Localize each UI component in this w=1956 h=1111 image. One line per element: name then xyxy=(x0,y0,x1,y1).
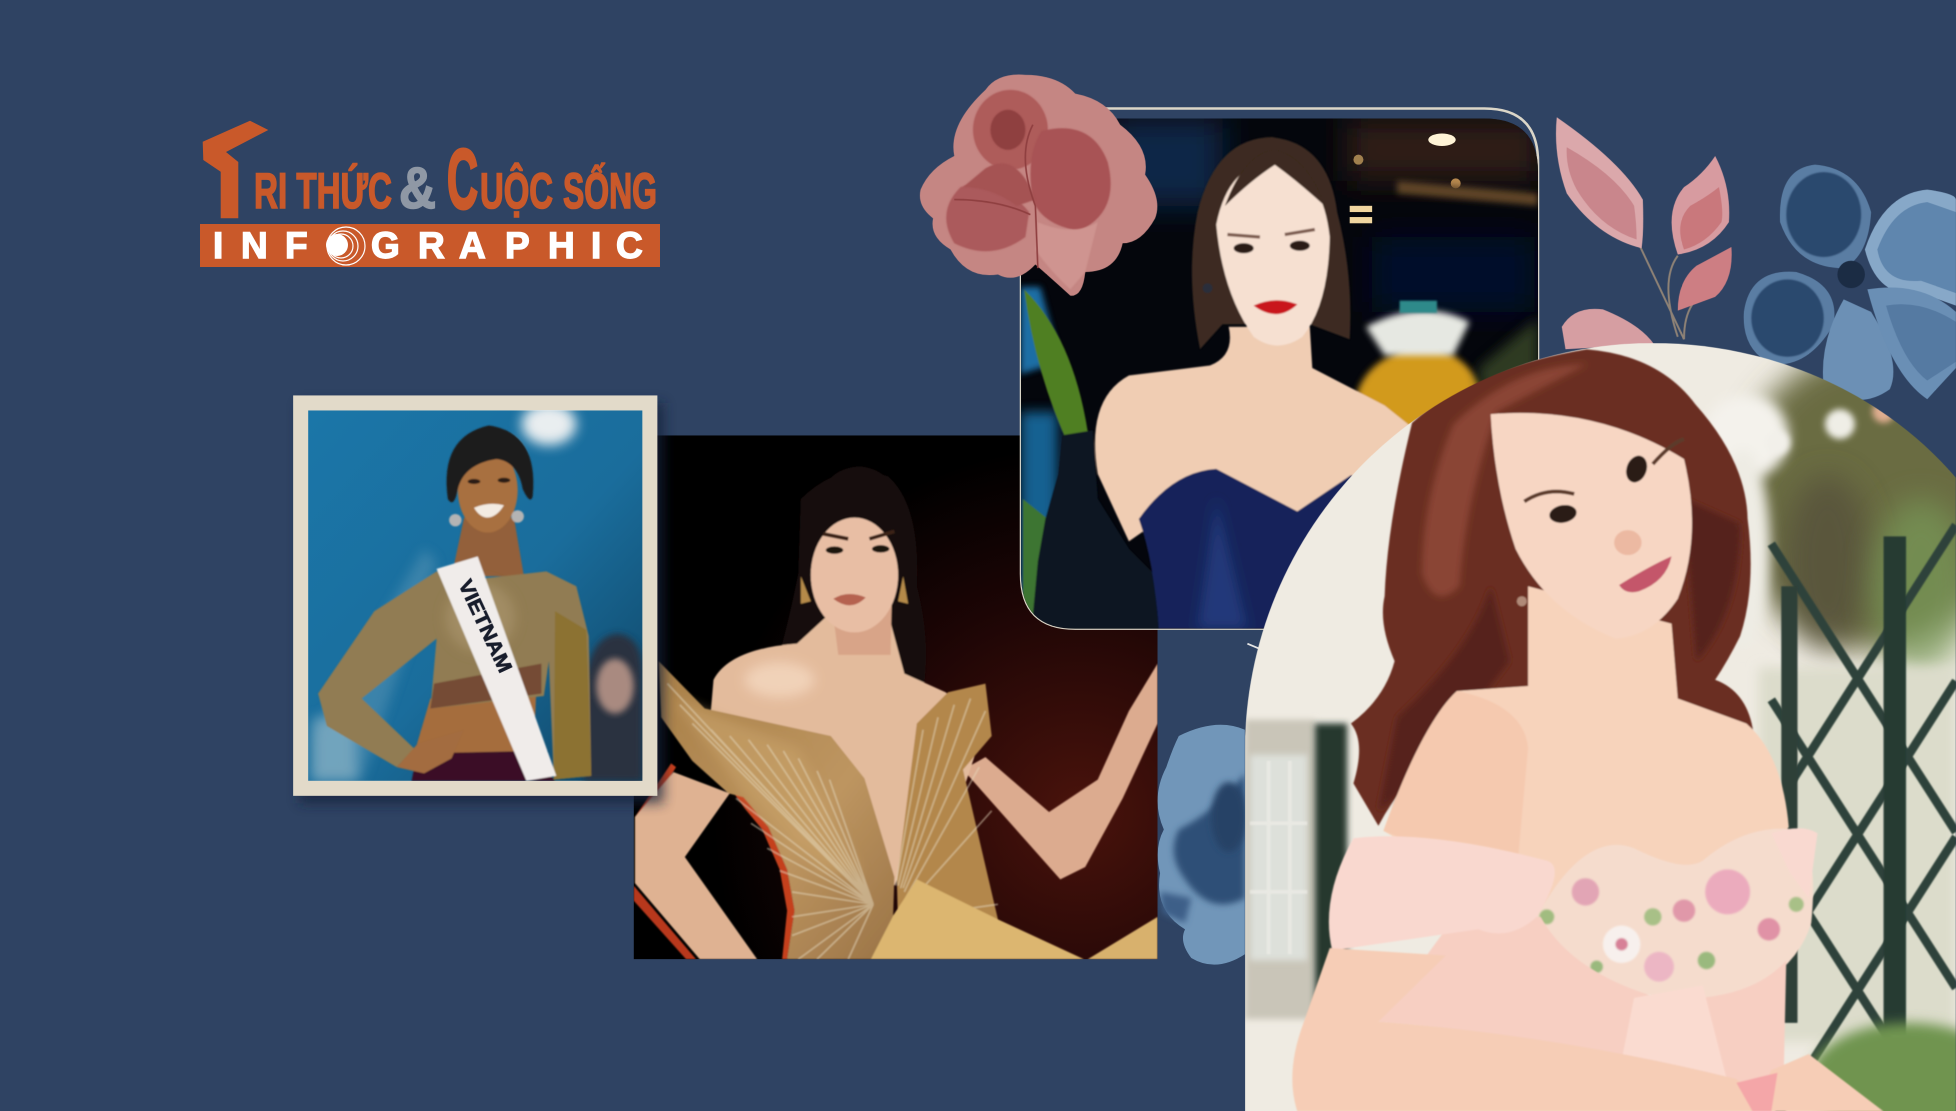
neck xyxy=(834,605,893,655)
sash xyxy=(437,556,556,781)
sash text: VIETNAM xyxy=(453,577,515,676)
bouquet behind xyxy=(1353,350,1482,425)
skirt xyxy=(410,750,556,781)
midriff xyxy=(416,696,537,754)
auburn hair xyxy=(1351,349,1754,826)
face xyxy=(1216,162,1330,346)
lattice trellis xyxy=(1771,525,1956,1111)
logo T mark xyxy=(203,121,268,218)
blue foliage at left xyxy=(1020,412,1058,599)
face xyxy=(1491,413,1692,639)
neck and torso skin xyxy=(1383,586,1789,948)
logo wordmark SỐNG: SỐNG xyxy=(563,162,657,219)
logo: Tri thức & Cuộc sống Infographic xyxy=(200,121,660,267)
logo wordmark UỘC: UỘC xyxy=(480,162,553,219)
golden bodice left xyxy=(659,661,894,959)
wall behind lattice xyxy=(1759,667,1956,1042)
frame shadow xyxy=(299,403,664,803)
short hair xyxy=(447,425,533,502)
logo big C: C xyxy=(447,132,478,226)
back hair xyxy=(1192,137,1350,349)
shoulders and chest xyxy=(710,614,985,886)
green leaf xyxy=(1024,289,1088,449)
background contestant xyxy=(584,634,642,781)
bush xyxy=(1809,1023,1956,1111)
red reflection on left edge xyxy=(635,762,677,817)
embroidered bodice xyxy=(1537,829,1813,999)
decoration: red watercolor peony xyxy=(920,75,1157,296)
right arm and hand xyxy=(963,664,1158,879)
building window xyxy=(1245,720,1315,1019)
face xyxy=(458,448,518,533)
logo ring icon xyxy=(326,227,365,265)
gold top and sleeves xyxy=(318,571,591,780)
hand on hip xyxy=(396,744,455,774)
skirt tulle xyxy=(871,879,1084,959)
neck xyxy=(452,518,524,576)
decoration: blue watercolor peony, lower xyxy=(1158,725,1246,965)
photo: woman with auburn hair and pink gown in large arch xyxy=(1245,343,1956,1111)
sunburst sequin lines xyxy=(667,684,998,959)
golden bodice right xyxy=(897,684,998,929)
rounded outline frame xyxy=(1021,109,1538,629)
eyes, nose and lips xyxy=(1524,439,1684,501)
photo: woman in golden gown on dark background xyxy=(634,435,1158,959)
left arm xyxy=(635,772,757,959)
logo GRAPHIC letters: GRAPHIC xyxy=(371,225,643,266)
white blurred patches xyxy=(1704,394,1789,479)
red dress lining xyxy=(732,791,795,959)
decoration: blue watercolor flower xyxy=(1744,165,1956,400)
photo: woman in navy velvet gown, rounded frame xyxy=(1020,109,1541,630)
flower centre xyxy=(1837,261,1865,288)
small white mark xyxy=(1247,644,1262,650)
logo orange bar xyxy=(200,224,660,267)
photo: woman in sequin top with Vietnam sash xyxy=(293,395,664,803)
photo frame xyxy=(293,395,657,796)
lower arm and hands xyxy=(1292,948,1771,1111)
logo wordmark RI THỨC: RI THỨC xyxy=(254,163,392,219)
tulle sleeves xyxy=(1329,836,1555,951)
neck and shoulders xyxy=(1095,327,1416,541)
logo ampersand: & xyxy=(399,156,436,221)
fur wrap xyxy=(1032,430,1159,629)
decoration: pink watercolor leaves with stem xyxy=(1556,117,1732,349)
face xyxy=(811,518,898,632)
logo INF letters: INF xyxy=(213,225,308,266)
pink draped gown xyxy=(1378,917,1786,1085)
back hair xyxy=(781,474,926,683)
navy velvet gown xyxy=(1138,468,1352,629)
blurred greenery xyxy=(1734,349,1956,649)
